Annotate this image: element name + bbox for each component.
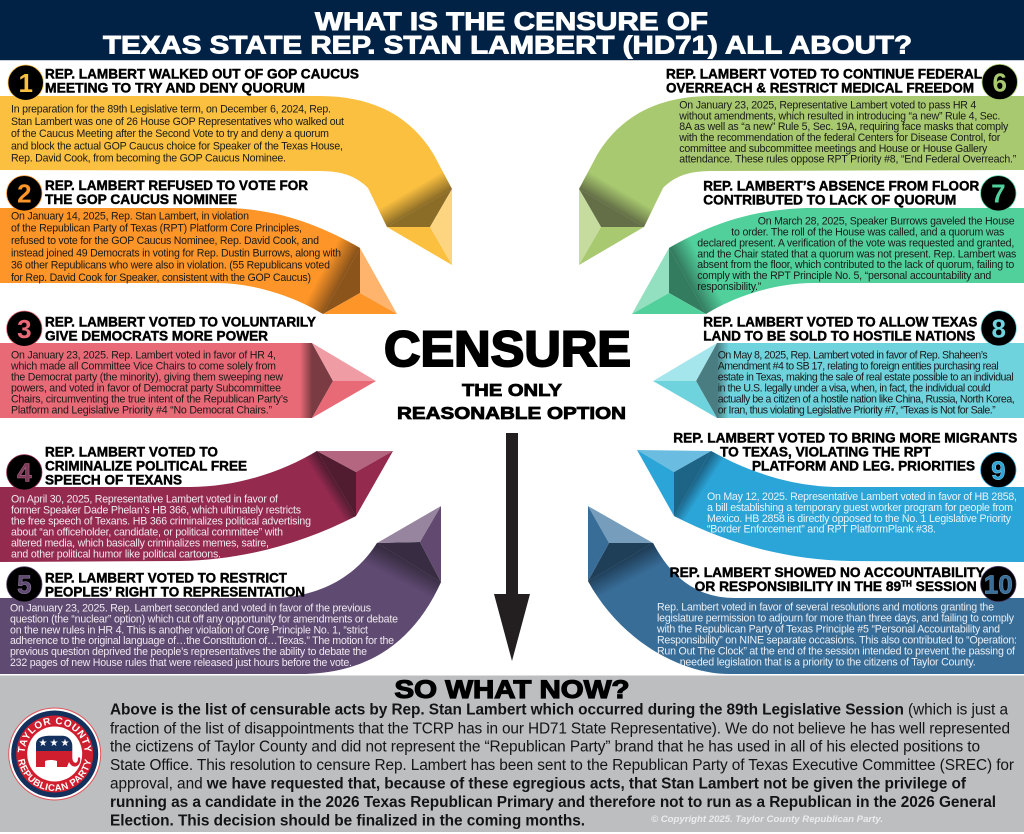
number badge 7 (981, 176, 1016, 211)
heading 6: OVERREACH & RESTRICT MEDICAL FREEDOM (666, 80, 974, 95)
ribbon arrow 3 (0, 343, 376, 418)
body text 5: previous question deprived the people’s representatives the ability to debate the (10, 646, 367, 658)
body text 9: On May 12, 2025. Representative Lambert voted in favor of HB 2858, (707, 491, 1017, 503)
ribbon arrow 7 (632, 208, 1024, 314)
panel 9: more migrants (637, 431, 1024, 562)
logo: Taylor County Republican Party: ★ (61, 738, 70, 749)
number badge 10 (981, 566, 1016, 602)
number badge 9 (981, 452, 1016, 488)
body text 1: Stan Lambert was one of 26 House GOP Representatives who walked out (11, 116, 344, 128)
body text 3: powers, and voted in favor of Democrat party Subcommittee (11, 383, 281, 395)
body text 6: with the recommendation of the federal Centers for Disease Control, for (678, 132, 1001, 144)
heading 7 (703, 179, 979, 208)
body text 5: on the new rules in HR 4. This is another violation of Core Principle No. 1, “strict (10, 624, 368, 636)
number badge 5: 5 (17, 570, 32, 600)
heading 7: CONTRIBUTED TO LACK OF QUORUM (703, 193, 956, 208)
heading 10: OR RESPONSIBILITY IN THE 89 (695, 579, 899, 594)
body text 7: and the Chair stated that a quorum was not present. Rep. Lambert was (697, 248, 1016, 260)
conclusion paragraph: running as a candidate in the 2026 Texas Republican Primary and therefore not to run as a Republican in the 2026 General (110, 794, 996, 811)
number badge 10: 10 (984, 569, 1013, 599)
body text 10: Responsibility” on NINE separate occasions. This also contributed to “Operation: (657, 634, 1017, 646)
heading 10: SESSION (912, 579, 977, 594)
panel 10: no accountability (588, 506, 1024, 674)
heading 1: REP. LAMBERT WALKED OUT OF GOP CAUCUS (45, 66, 359, 81)
number badge 9: 9 (991, 455, 1006, 485)
ribbon arrow 9 (637, 450, 1024, 562)
body text 10 (656, 602, 1017, 668)
body text 8: actually be a citizen of a hostile nation like China, Russia, North Korea, (718, 394, 1015, 406)
body text 5: adherence to the original language of…the Constitution of…Texas.” The motion for the (10, 635, 394, 647)
body text 3: Platform and Legislative Priority #4 “No Democrat Chairs.” (11, 405, 272, 417)
heading 1 (45, 66, 359, 95)
heading 5: REP. LAMBERT VOTED TO RESTRICT (45, 570, 288, 585)
heading 5: PEOPLES’ RIGHT TO REPRESENTATION (45, 584, 305, 599)
number badge 8 (981, 311, 1016, 346)
logo: Taylor County Republican Party: TAYLOR COUNTY (18, 717, 92, 752)
body text 6: attendance. These rules oppose RPT Priority #8, “End Federal Overreach.” (679, 154, 1017, 166)
number badge 4: 4 (17, 458, 32, 488)
ribbon arrow 4 (0, 451, 393, 562)
body text 3 (10, 350, 288, 417)
copyright note: © Copyright 2025. Taylor County Republican Party. (651, 814, 883, 825)
body text 8: On May 8, 2025, Rep. Lambert voted in favor of Rep. Shaheen’s (718, 350, 988, 362)
heading 10: TH (901, 580, 912, 588)
heading 10: REP. LAMBERT SHOWED NO ACCOUNTABILITY (670, 565, 985, 580)
body text 10: Rep. Lambert voted in favor of several resolutions and motions granting the (657, 602, 994, 614)
heading 2 (45, 178, 308, 207)
body text 6: without amendments, which resulted in introducing “a new” Rule 4, Sec. (678, 110, 1000, 122)
body text 8 (718, 350, 1015, 417)
header banner: WHAT IS THE CENSURE OF (315, 8, 708, 36)
conclusion paragraph: Election. This decision should be finalized in the coming months. (110, 812, 585, 829)
center callout: censure: THE ONLY (462, 380, 562, 400)
conclusion paragraph: Above is the list of censurable acts by Rep. Stan Lambert which occurred during the 89th Legislative Session (which is just a (110, 702, 1008, 719)
heading 9 (673, 431, 1017, 474)
body text 3: which made all Committee Vice Chairs to come solely from (10, 361, 276, 373)
heading 7: REP. LAMBERT’S ABSENCE FROM FLOOR (703, 179, 979, 194)
body text 4: and other political humor like political cartoons. (11, 548, 221, 560)
ribbon arrow 1 (0, 96, 452, 265)
logo: Taylor County Republican Party (8, 708, 102, 800)
body text 8: or Iran, thus violating Legislative Priority #7, “Texas is Not for Sale.” (718, 405, 996, 417)
body text 4: former Speaker Dade Phelan’s HB 366, which ultimately restricts (11, 505, 301, 517)
number badge 8: 8 (991, 314, 1006, 344)
body text 10: needed legislation that is a priority to the citizens of Taylor County. (680, 656, 976, 668)
number badge 5 (7, 567, 42, 602)
number badge 2: 2 (17, 179, 32, 209)
heading 9: PLATFORM AND LEG. PRIORITIES (752, 459, 975, 474)
heading 8: LAND TO BE SOLD TO HOSTILE NATIONS (703, 329, 975, 344)
number badge 2 (7, 176, 42, 211)
body text 6: On January 23, 2025, Representative Lambert voted to pass HR 4 (679, 99, 976, 111)
body text 7: comply with the RPT Principle No. 5, “personal accountability and (697, 270, 991, 282)
ribbon arrow 10 (588, 506, 1024, 674)
body text 7: On March 28, 2025, Speaker Burrows gaveled the House (758, 216, 1015, 228)
center callout: censure (384, 321, 631, 423)
center callout: censure: CENSURE (384, 321, 631, 377)
heading 8 (703, 315, 977, 344)
body text 4: On April 30, 2025, Representative Lambert voted in favor of (11, 494, 278, 506)
heading 10 (670, 565, 985, 594)
body text 2: refused to vote for the GOP Caucus Nominee, Rep. David Cook, and (11, 235, 319, 247)
body text 5: question (the “nuclear” option) which cut off any opportunity for amendments or debate (10, 613, 398, 625)
conclusion paragraph: fraction of the list of disappointments that the TCRP has in our HD71 State Representative). We do not believe he has well represented (110, 720, 1010, 737)
body text 5: On January 23, 2025. Rep. Lambert seconded and voted in favor of the previous (10, 602, 371, 614)
body text 2: for Rep. David Cook for Speaker, consistent with the GOP Caucus) (11, 272, 311, 284)
conclusion paragraph: the cictizens of Taylor County and did not represent the “Republican Party” brand that he has used in all of his elected positions to (110, 739, 980, 756)
heading 1: MEETING TO TRY AND DENY QUORUM (45, 80, 305, 95)
heading 3: GIVE DEMOCRATS MORE POWER (45, 329, 268, 344)
arrow: pointing down to conclusion (494, 433, 530, 661)
body text 9 (707, 491, 1017, 536)
number badge 6: 6 (992, 67, 1007, 97)
ribbon arrow 6 (579, 96, 1024, 265)
body text 8: estate in Texas, making the sale of real estate possible to an individual (718, 372, 1014, 384)
body text 10: Run Out The Clock” at the end of the session intended to prevent the passing of (657, 645, 1015, 657)
heading 4: SPEECH OF TEXANS (45, 472, 182, 487)
heading 6 (666, 66, 982, 95)
body text 3: the Democrat party (the minority), giving them sweeping new (11, 372, 283, 384)
body text 9: Mexico. HB 2858 is directly opposed to the No. 1 Legislative Priority (707, 513, 1012, 525)
number badge 3 (7, 311, 42, 346)
body text 5: 232 pages of new House rules that were released just hours before the vote. (10, 657, 352, 669)
body text 10: legislature permission to adjourn for more than three days, and failing to comply (657, 613, 1015, 625)
body text 6: 8A as well as “a new” Rule 5, Sec. 19A, requiring face masks that comply (679, 121, 1009, 133)
body text 7: to order. The roll of the House was called, and a quorum was (731, 226, 1004, 238)
body text 6: committee and subcommittee meetings and House or House Gallery (679, 143, 988, 155)
panel 7: absence from floor (632, 176, 1024, 314)
ribbon arrow 2 (0, 208, 397, 314)
logo: Taylor County Republican Party: ★ (50, 738, 59, 749)
heading: so what now: SO WHAT NOW? (394, 676, 630, 704)
heading 6: REP. LAMBERT VOTED TO CONTINUE FEDERAL (666, 66, 982, 81)
panel 4: criminalize free speech (0, 444, 393, 562)
body text 1: Rep. David Cook, from becoming the GOP Caucus Nominee. (11, 152, 286, 164)
conclusion paragraph: State Office. This resolution to censure Rep. Lambert has been sent to the Republican Party of Texas Executive Committee (SREC) for (110, 757, 1014, 774)
panel 1: walked out of caucus (0, 65, 452, 265)
body text 2: 36 other Republicans who were also in violation. (55 Republicans voted (11, 260, 330, 272)
number badge 1: 1 (18, 68, 33, 98)
body text 3: On January 23, 2025. Rep. Lambert voted in favor of HR 4, (11, 350, 276, 362)
body text 4: the free speech of Texans. HB 366 criminalizes political advertising (11, 516, 311, 528)
conclusion paragraph (110, 702, 1014, 829)
heading 2: THE GOP CAUCUS NOMINEE (45, 192, 237, 207)
panel: so what now (0, 676, 1024, 832)
header banner (0, 0, 1024, 61)
heading 5 (45, 570, 305, 599)
ribbon arrow 5 (0, 506, 441, 674)
heading 8: REP. LAMBERT VOTED TO ALLOW TEXAS (703, 315, 977, 330)
heading 9: TO TEXAS, VIOLATING THE RPT (720, 445, 932, 460)
heading 2: REP. LAMBERT REFUSED TO VOTE FOR (45, 178, 308, 193)
body text 1: In preparation for the 89th Legislative term, on December 6, 2024, Rep. (11, 104, 331, 116)
body text 1 (11, 104, 344, 164)
panel 2: refused to vote for nominee (0, 176, 397, 314)
body text 2: On January 14, 2025, Rep. Stan Lambert, in violation (11, 210, 249, 222)
body text 7: declared present. A verification of the vote was requested and granted, (697, 237, 1014, 249)
body text 4: about “an officeholder, candidate, or political committee” with (11, 526, 283, 538)
body text 2: instead joined 49 Democrats in voting for Rep. Dustin Burrows, along with (11, 247, 341, 259)
body text 2: of the Republican Party of Texas (RPT) Platform Core Principles, (11, 223, 302, 235)
header banner: TEXAS STATE REP. STAN LAMBERT (HD71) ALL ABOUT? (103, 31, 912, 59)
number badge 6 (982, 64, 1017, 100)
body text 7 (697, 216, 1016, 293)
logo: Taylor County Republican Party: ★ (39, 738, 48, 749)
body text 5 (10, 602, 398, 669)
body text 8: Amendment #4 to SB 17, relating to foreign entities purchasing real (718, 361, 999, 373)
number badge 4 (7, 455, 42, 490)
heading 3: REP. LAMBERT VOTED TO VOLUNTARILY (45, 315, 316, 330)
body text 7: responsibility.” (697, 281, 762, 293)
body text 2 (11, 210, 341, 284)
number badge 3: 3 (17, 314, 32, 344)
panel 5: restrict right to representation (0, 506, 441, 674)
panel 8: land sold to hostile nations (653, 311, 1024, 418)
heading 9: REP. LAMBERT VOTED TO BRING MORE MIGRANTS (673, 431, 1017, 446)
body text 3: Chairs, circumventing the true intent of the Republican Party’s (11, 394, 288, 406)
body text 7: absent from the floor, which contributed to the lack of quorum, failing to (697, 259, 1014, 271)
body text 9: a bill establishing a temporary guest worker program for people from (707, 502, 1013, 514)
body text 9: “Border Enforcement” and RPT PlatformPlank #38. (707, 524, 936, 536)
body text 10: with the Republican Party of Texas Principle #5 “Personal Accountability and (656, 624, 1000, 636)
ribbon arrow 8 (653, 343, 1024, 418)
center callout: censure: REASONABLE OPTION (397, 403, 626, 423)
heading 4: REP. LAMBERT VOTED TO (45, 444, 218, 459)
heading 4: CRIMINALIZE POLITICAL FREE (45, 458, 247, 473)
body text 1: and block the actual GOP Caucus choice for Speaker of the Texas House, (11, 140, 343, 152)
body text 6 (678, 99, 1017, 166)
number badge 7: 7 (991, 179, 1006, 209)
body text 1: of the Caucus Meeting after the Second Vote to try and deny a quorum (11, 128, 329, 140)
body text 8: in the U.S. legally under a visa, when, in fact, the individual could (718, 383, 991, 395)
body text 4: altered media, which basically criminalizes memes, satire, (11, 537, 269, 549)
conclusion paragraph: approval, and we have requested that, because of these egregious acts, that Stan Lambert not be given the privilege of (110, 776, 967, 793)
logo: Taylor County Republican Party: REPUBLICAN PARTY (18, 758, 91, 792)
heading 3 (45, 315, 316, 344)
number badge 1 (8, 65, 43, 100)
panel 6: federal overreach (579, 64, 1024, 265)
panel 3: more power to Democrats (0, 311, 376, 418)
body text 4 (11, 494, 311, 560)
heading 4 (45, 444, 247, 487)
